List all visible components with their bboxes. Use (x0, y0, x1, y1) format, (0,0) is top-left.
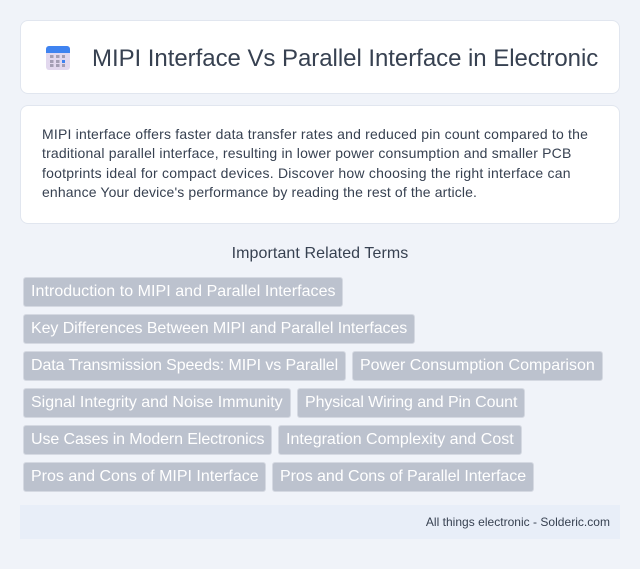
tag: Power Consumption Comparison (360, 357, 595, 374)
intro paragraph: traditional parallel interface, resulting in lower power consumption and smaller PCB (42, 145, 571, 161)
tag: Key Differences Between MIPI and Parallel Interfaces (31, 320, 407, 337)
tag (23, 351, 346, 381)
intro paragraph: footprints ideal for compact devices. Discover how choosing the right interface can (42, 165, 571, 181)
tag: Introduction to MIPI and Parallel Interfaces (31, 283, 336, 300)
tag: Physical Wiring and Pin Count (305, 394, 517, 411)
intro paragraph (42, 126, 588, 200)
footer credit: All things electronic - Solderic.com (426, 515, 610, 529)
related terms tags (23, 277, 603, 492)
footer bar (20, 505, 620, 539)
tag (272, 462, 534, 492)
tag: Integration Complexity and Cost (286, 431, 514, 448)
tag: Pros and Cons of Parallel Interface (280, 468, 526, 485)
tag: Pros and Cons of MIPI Interface (31, 468, 259, 485)
tag (352, 351, 603, 381)
tag: Use Cases in Modern Electronics (31, 431, 264, 448)
tag: Signal Integrity and Noise Immunity (31, 394, 283, 411)
intro paragraph: MIPI interface offers faster data transfer rates and reduced pin count compared to the (42, 126, 588, 142)
section heading: Important Related Terms (232, 245, 408, 262)
tag (23, 277, 343, 307)
tag (23, 425, 272, 455)
title: MIPI Interface Vs Parallel Interface in Electronic (92, 45, 598, 72)
tag (23, 462, 266, 492)
intro paragraph: enhance Your device's performance by reading the rest of the article. (42, 184, 477, 200)
tag (23, 314, 415, 344)
header panel (20, 20, 620, 94)
tag: Data Transmission Speeds: MIPI vs Parallel (31, 357, 338, 374)
intro text panel (20, 105, 620, 224)
tag (23, 388, 291, 418)
tag (297, 388, 525, 418)
icon: calendar grid (46, 46, 70, 70)
tag (278, 425, 522, 455)
